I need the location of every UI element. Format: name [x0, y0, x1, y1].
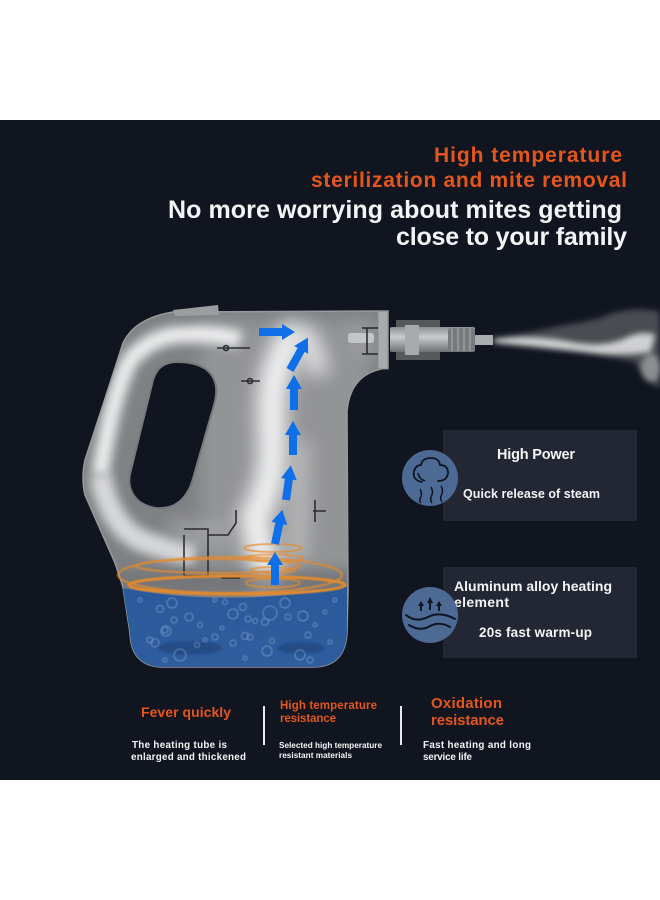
bubbles: [138, 598, 337, 663]
inner connector: [348, 333, 374, 343]
front collar: [378, 311, 388, 369]
heading: No more worrying about mites getting: [168, 196, 622, 224]
divider one: [263, 706, 265, 745]
panel: high power: High Power: [497, 447, 575, 463]
feature: oxidation resistance: Oxidation: [431, 695, 502, 712]
feature: oxidation resistance: service life: [423, 752, 473, 763]
icon: steam cloud: [402, 450, 458, 506]
feature: fever quickly: [131, 704, 246, 763]
steam gun body: [83, 305, 388, 667]
panel: heating element: Aluminum alloy heating: [454, 578, 612, 594]
feature: high temperature resistance: resistance: [280, 713, 336, 725]
heading: [168, 144, 627, 251]
water shadow right: [277, 642, 325, 654]
panel: high power: Quick release of steam: [463, 487, 600, 501]
feature: fever quickly: The heating tube is: [132, 740, 228, 751]
feature: oxidation resistance: Fast heating and long: [423, 740, 531, 751]
panel: heating element: 20s fast warm-up: [479, 625, 592, 640]
panel: heating element: [443, 567, 637, 658]
dark background panel: [0, 120, 660, 780]
feature: high temperature resistance: Selected high temperature: [279, 741, 382, 750]
heating coils: [118, 544, 345, 594]
feature: oxidation resistance: resistance: [431, 712, 504, 729]
handle opening outline: [129, 362, 216, 508]
internal fittings: [184, 328, 378, 578]
feature: oxidation resistance: [423, 695, 531, 763]
feature: fever quickly: enlarged and thickened: [131, 752, 246, 763]
feature: high temperature resistance: High temperature: [280, 700, 377, 712]
feature: high temperature resistance: [279, 700, 382, 760]
body outline: [83, 311, 388, 667]
steam inside body: [100, 320, 378, 592]
feature: fever quickly: Fever quickly: [141, 704, 231, 720]
top button: [173, 305, 219, 316]
steam flow arrows: [259, 324, 315, 585]
water tank: [123, 587, 347, 667]
steam spray: [493, 310, 660, 388]
steam gun nozzle: [390, 320, 493, 360]
panel: high power: [443, 430, 637, 521]
heading: close to your family: [396, 223, 627, 251]
heading: High temperature: [434, 144, 622, 167]
panel: heating element: element: [454, 594, 509, 610]
water shadows: [158, 641, 222, 655]
divider two: [400, 706, 402, 745]
icon: heat waves: [402, 587, 458, 643]
heading: sterilization and mite removal: [311, 169, 627, 192]
feature: high temperature resistance: resistant materials: [279, 751, 352, 760]
